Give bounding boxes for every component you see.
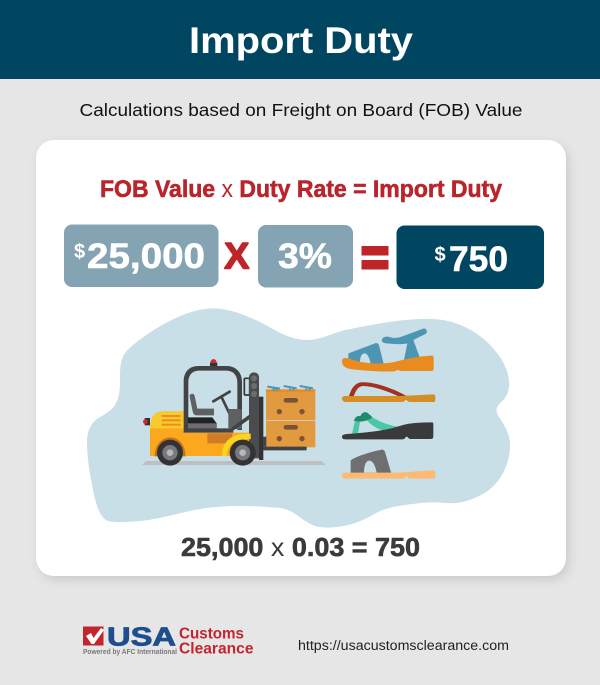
- beacon: [210, 363, 217, 367]
- sandal: red and yellow: [342, 382, 435, 402]
- illustration blob: [87, 308, 510, 528]
- logo tagline: Powered by AFC International: [83, 649, 177, 656]
- formula heading: FOB Value x Duty Rate = Import Duty: [100, 176, 503, 203]
- title banner: [0, 0, 600, 79]
- equals sign: [362, 246, 388, 270]
- box: import duty: 750: [449, 239, 508, 279]
- steering wheel: [213, 392, 230, 401]
- sandal: blue and orange: [342, 329, 434, 372]
- box: duty rate: 3%: [278, 236, 332, 276]
- forks: [263, 447, 307, 450]
- logo check mark: [83, 626, 104, 646]
- logo: [83, 622, 254, 658]
- logo USA: USA: [107, 622, 176, 652]
- sandal: green and black: [342, 412, 433, 439]
- mast: [244, 372, 266, 460]
- sandal: grey and peach: [342, 450, 435, 479]
- logo Customs Clearance: Clearance: [179, 640, 254, 658]
- illustration: forklift: [142, 359, 326, 466]
- body: [150, 411, 250, 456]
- logo Customs Clearance: [179, 626, 254, 658]
- cab frame: [184, 366, 242, 433]
- fenders: [155, 437, 186, 456]
- panel: formula card: [36, 140, 566, 576]
- box: import duty: $: [434, 244, 446, 266]
- multiply sign: X: [224, 236, 250, 276]
- website url: https://usacustomsclearance.com: [298, 638, 509, 653]
- seat: [190, 394, 214, 415]
- tail light: [145, 418, 150, 425]
- box: FOB value: 25,000: [87, 236, 205, 276]
- box: FOB value: $: [74, 241, 85, 263]
- ground shadow: [142, 461, 326, 465]
- logo Customs Clearance: Customs: [179, 626, 244, 642]
- box: FOB value: [64, 224, 218, 287]
- wheels: [157, 440, 256, 466]
- box: import duty: [396, 226, 544, 289]
- pallet boxes: [266, 386, 315, 447]
- calculation text: 25,000 x 0.03 = 750: [181, 532, 420, 562]
- subtitle: Calculations based on Freight on Board (FOB) Value: [80, 100, 522, 120]
- title banner: Import Duty: [189, 20, 413, 61]
- box: duty rate: [258, 225, 353, 288]
- illustration: sandals: [342, 329, 435, 479]
